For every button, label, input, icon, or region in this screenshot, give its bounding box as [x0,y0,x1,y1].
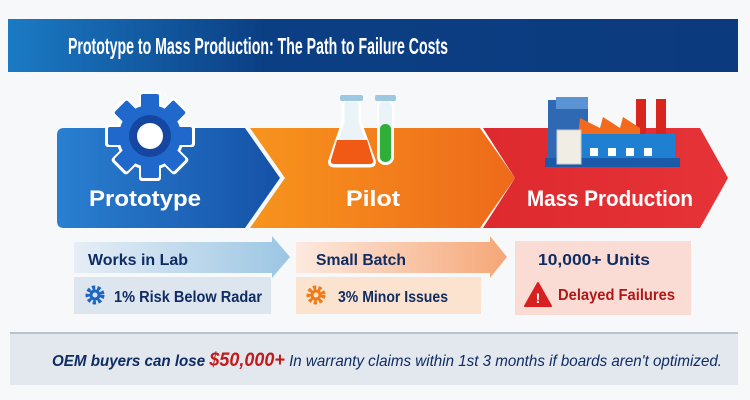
box: 3% minor issues [296,277,481,314]
box: small batch: Small Batch [316,252,406,269]
arrow: prototype: Prototype [89,186,201,211]
bottom banner [10,332,738,385]
arrow: pilot: Pilot [346,186,401,211]
bottom banner: OEM buyers can lose $50,000+ In warranty claims within 1st 3 months if boards aren't optimized. [52,350,722,371]
title bar [8,19,738,72]
box: 3% minor issues: 3% Minor Issues [338,289,448,306]
box: works in lab [74,236,290,278]
arrow: prototype [57,128,280,228]
box: works in lab: Works in Lab [88,252,188,269]
box: 10,000+ units / delayed failures: ! [536,290,540,306]
icon: gear [105,91,195,181]
title bar: Prototype to Mass Production: The Path to Failure Costs [68,33,448,59]
arrow: mass production [483,128,728,228]
box: small batch [296,236,507,278]
box: 1% risk: 1% Risk Below Radar [114,289,262,306]
icon: flask and test tube [330,95,396,166]
box: 10,000+ units / delayed failures [515,241,691,315]
icon: factory [545,97,680,167]
arrow: mass production: Mass Production [527,186,693,211]
arrow: pilot [250,128,515,228]
box: 1% risk [74,277,271,314]
box: 10,000+ units / delayed failures: Delayed Failures [558,287,675,304]
box: 10,000+ units / delayed failures: 10,000+ Units [538,252,650,269]
